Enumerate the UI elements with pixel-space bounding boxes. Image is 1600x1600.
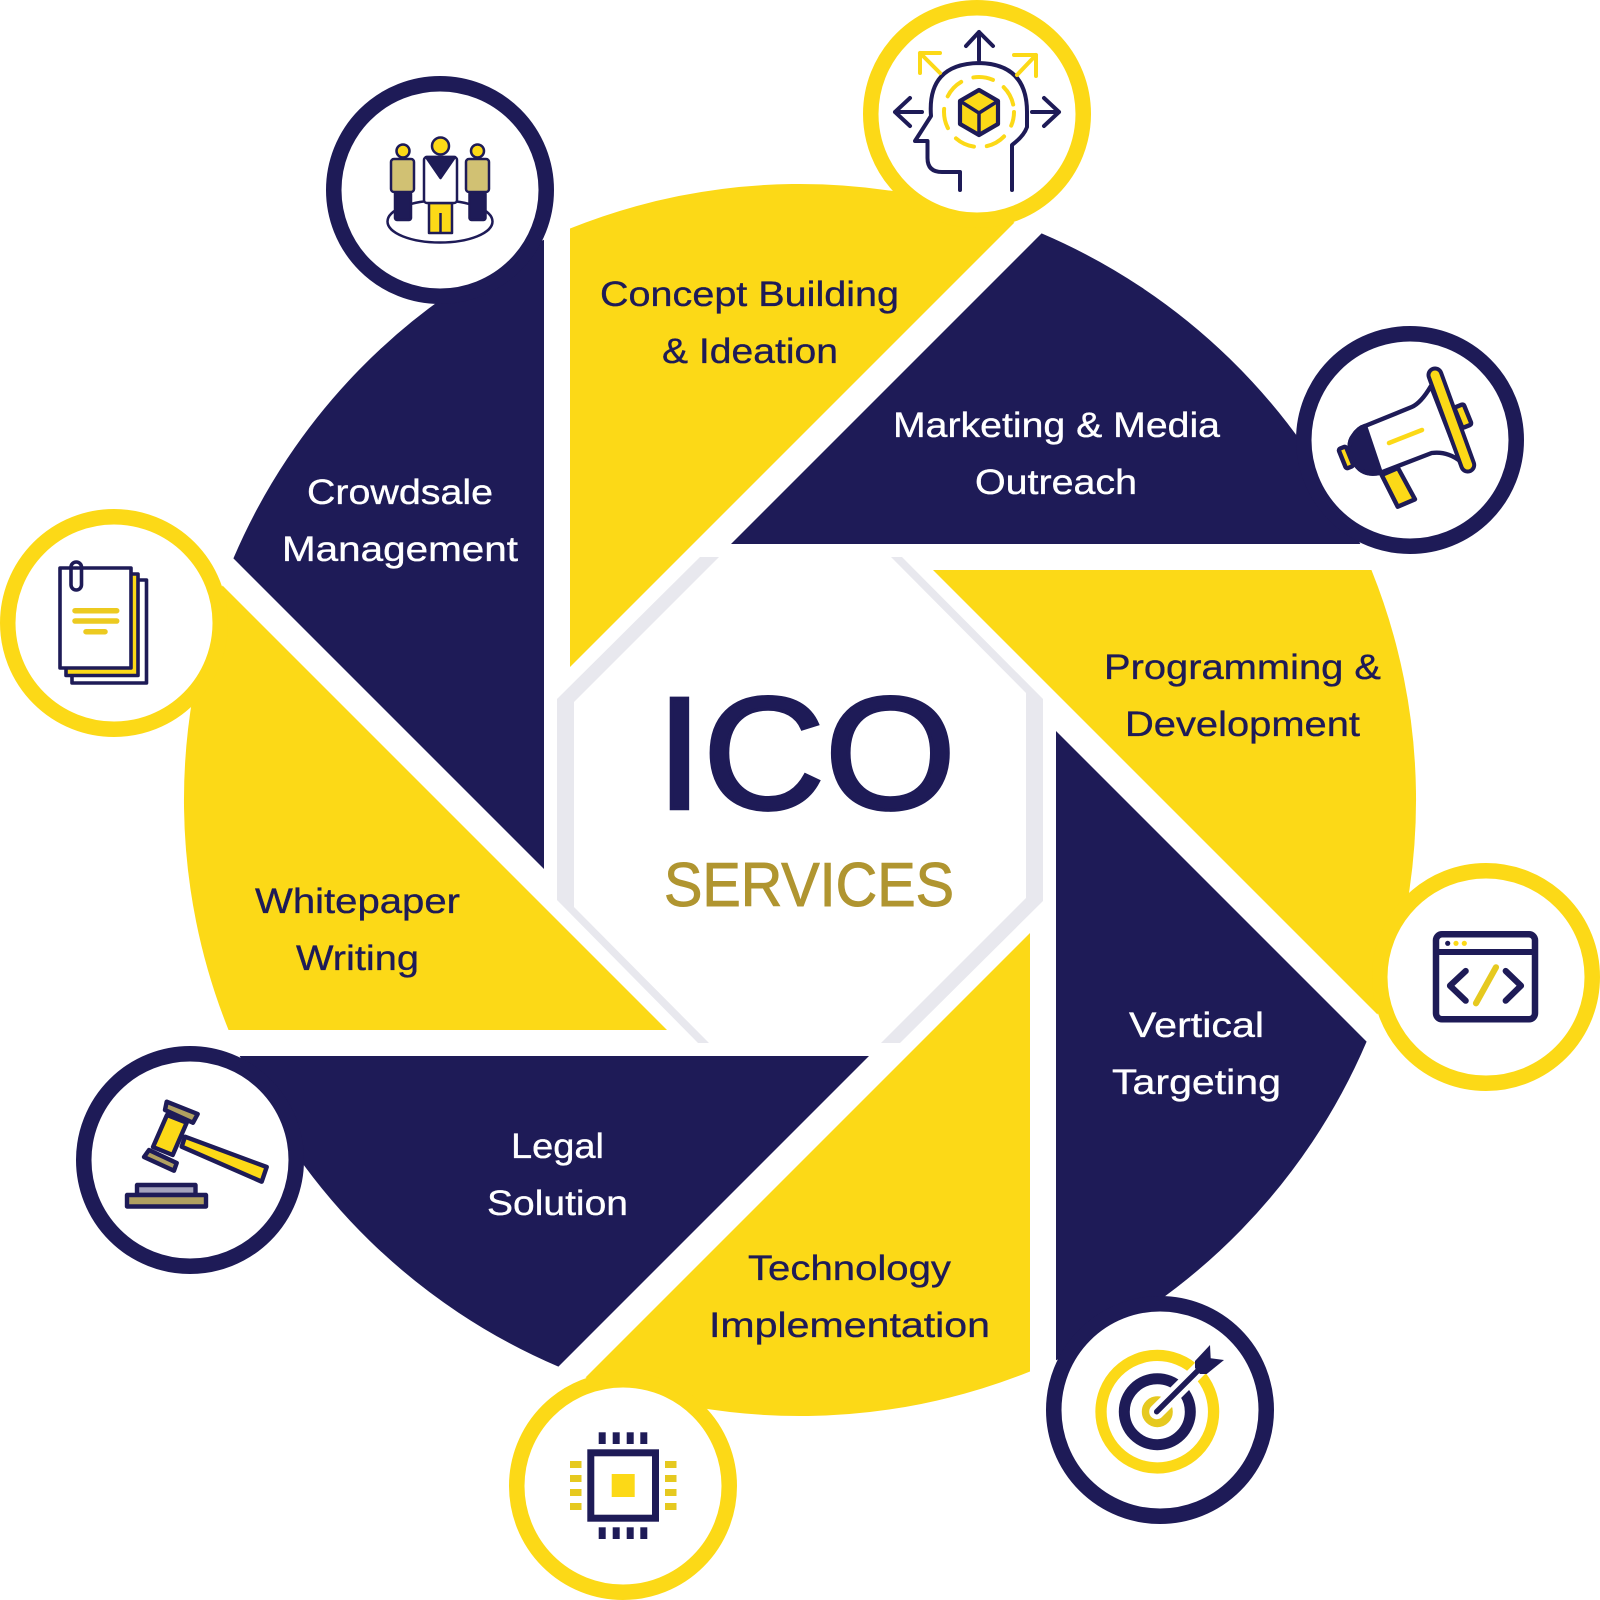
blade bbox=[731, 233, 1360, 544]
label: & Ideation bbox=[662, 332, 838, 371]
label: Programming & bbox=[1104, 648, 1381, 687]
icon: target with arrow bbox=[1054, 1304, 1266, 1516]
label bbox=[709, 1249, 990, 1345]
panel: Technology Implementation bbox=[517, 933, 1030, 1592]
icon: gavel bbox=[84, 1054, 296, 1266]
title: ICO Services bbox=[656, 664, 956, 920]
label: Development bbox=[1125, 705, 1360, 744]
label bbox=[600, 275, 899, 371]
label: Management bbox=[282, 530, 518, 569]
blade bbox=[586, 933, 1030, 1416]
icon: documents bbox=[8, 517, 220, 729]
label: Solution bbox=[487, 1184, 628, 1223]
panel: Legal Solution bbox=[84, 1054, 869, 1367]
panel: Crowdsale Management bbox=[233, 84, 546, 869]
blade bbox=[233, 240, 544, 869]
label: Implementation bbox=[709, 1306, 990, 1345]
label: Targeting bbox=[1112, 1063, 1281, 1102]
label bbox=[1104, 648, 1381, 744]
blade bbox=[570, 184, 1014, 667]
label bbox=[893, 406, 1221, 502]
blade bbox=[184, 586, 667, 1030]
label: Legal bbox=[511, 1127, 604, 1166]
panel: Concept Building & Ideation bbox=[570, 8, 1083, 667]
icon: microchip bbox=[517, 1380, 729, 1592]
label: Crowdsale bbox=[307, 473, 493, 512]
label bbox=[282, 473, 518, 569]
panel: Vertical Targeting bbox=[1054, 731, 1367, 1516]
heading: ICO: ICO bbox=[656, 664, 956, 842]
panel: Programming & Development bbox=[933, 570, 1592, 1083]
label bbox=[487, 1127, 628, 1223]
label: Outreach bbox=[975, 463, 1137, 502]
label bbox=[255, 882, 460, 978]
icon: code window bbox=[1380, 871, 1592, 1083]
blade bbox=[933, 570, 1416, 1014]
label: Whitepaper bbox=[255, 882, 460, 921]
icon: megaphone bbox=[1304, 334, 1516, 546]
blade bbox=[1056, 731, 1367, 1360]
label: Concept Building bbox=[600, 275, 899, 314]
center octagon frame bbox=[557, 557, 1043, 1043]
icon: team of people bbox=[334, 84, 546, 296]
subheading: Services: SERVICES bbox=[664, 851, 954, 920]
icon: head with cube bbox=[871, 8, 1083, 220]
label: Vertical bbox=[1129, 1006, 1264, 1045]
label: Writing bbox=[296, 939, 419, 978]
label bbox=[1112, 1006, 1281, 1102]
label: Technology bbox=[748, 1249, 952, 1288]
panel: Whitepaper Writing bbox=[8, 517, 667, 1030]
blade bbox=[240, 1056, 869, 1367]
label: Marketing & Media bbox=[893, 406, 1221, 445]
panel: Marketing & Media Outreach bbox=[731, 233, 1516, 546]
